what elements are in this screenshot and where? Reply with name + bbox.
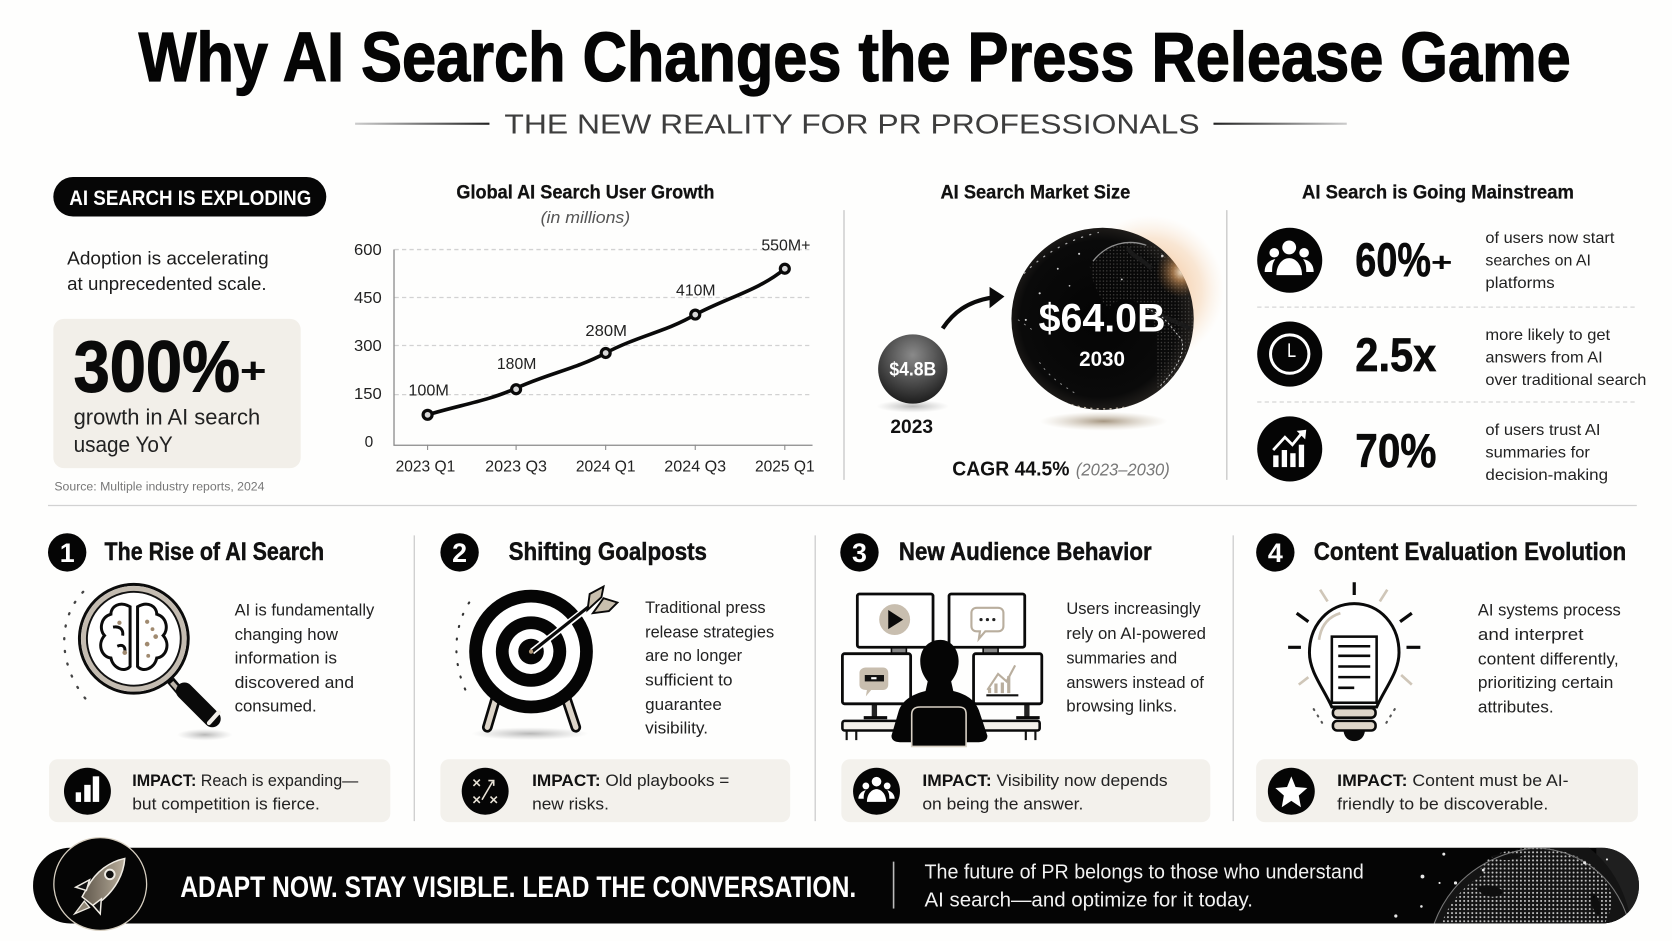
icon: person at monitors	[842, 594, 1042, 746]
impact card 4: IMPACT: Content must be AI-	[1337, 771, 1569, 790]
y axis labels	[354, 242, 382, 451]
data labels: 100M	[408, 383, 449, 400]
pill heading: AI SEARCH IS EXPLODING	[69, 186, 311, 210]
body text 2: release strategies	[645, 623, 774, 642]
CAGR label: (2023–2030)	[1076, 460, 1170, 480]
heading 4: Content Evaluation Evolution	[1314, 539, 1626, 566]
icon: light bulb with document	[1288, 582, 1420, 741]
heading 2: Shifting Goalposts	[509, 539, 707, 566]
number badge 4: 4	[1268, 538, 1283, 568]
body text 2: are no longer	[645, 646, 743, 665]
y axis labels: 300	[354, 338, 382, 355]
data labels: 180M	[497, 356, 536, 373]
body text 2: sufficient to	[645, 671, 733, 690]
stat card: 300%+: +	[240, 350, 267, 391]
impact card 1: IMPACT: Reach is expanding—	[132, 771, 359, 790]
banner tagline: AI search—and optimize for it today.	[925, 889, 1253, 911]
body text 1: information is	[235, 648, 337, 667]
body text 1	[235, 600, 375, 715]
big sphere 2030: 2030	[1079, 347, 1125, 371]
body text 4: and interpret	[1478, 625, 1584, 644]
source note: Source: Multiple industry reports, 2024	[54, 480, 265, 494]
stat card: 300%+	[53, 319, 301, 468]
number badge 2: 2	[452, 538, 467, 568]
number badge 1: 1	[60, 538, 75, 568]
number badge 4	[1256, 533, 1295, 572]
data labels: 550M+	[761, 238, 810, 255]
x axis labels: 2024 Q3	[664, 458, 726, 475]
data points	[423, 264, 789, 419]
CAGR label: CAGR 44.5%	[952, 459, 1070, 481]
stat: 60%+	[1257, 228, 1615, 293]
stat: 2.5x: more likely to get	[1485, 327, 1611, 344]
stat: 2.5x: over traditional search	[1485, 372, 1646, 389]
adoption text: Adoption is accelerating	[67, 247, 269, 268]
data labels: 410M	[676, 282, 716, 299]
body text 3: rely on AI-powered	[1066, 624, 1206, 643]
stat: 70%: decision-making	[1485, 467, 1608, 484]
panel 1: the rise of AI search	[48, 533, 390, 822]
body text 4: attributes.	[1478, 697, 1554, 716]
stat: 60%+: +	[1431, 249, 1452, 277]
body text 1: consumed.	[235, 696, 317, 715]
stat: 2.5x: 2.5x	[1355, 329, 1436, 381]
impact card 4	[1256, 759, 1638, 822]
number badge 1	[48, 533, 86, 572]
body text 2: guarantee	[645, 695, 722, 714]
x axis labels: 2023 Q3	[485, 458, 547, 475]
impact card 3: on being the answer.	[922, 794, 1083, 813]
body text 3	[1066, 599, 1206, 715]
impact card 2: IMPACT: Old playbooks =	[532, 771, 729, 790]
stat: 60%+: platforms	[1485, 275, 1555, 292]
rocket badge	[54, 838, 147, 930]
number badge 2	[440, 533, 479, 572]
subtitle with rules: THE NEW REALITY FOR PR PROFESSIONALS	[504, 108, 1200, 139]
panel: market size	[877, 182, 1224, 481]
panel 2: shifting goalposts	[440, 533, 790, 822]
x axis labels: 2025 Q1	[755, 458, 815, 475]
impact card 2	[440, 759, 790, 822]
small sphere 2023: $4.8B	[889, 359, 936, 380]
body text 2: visibility.	[645, 719, 708, 738]
globe texture	[1394, 848, 1639, 923]
call-to-action banner	[33, 838, 1639, 930]
line chart: user growth	[354, 182, 815, 475]
heading 1: The Rise of AI Search	[105, 539, 324, 566]
banner tagline	[925, 862, 1364, 911]
stat card: 300%+: usage YoY	[74, 432, 173, 457]
y axis labels: 450	[354, 290, 382, 307]
icon: magnifying glass with brain	[64, 584, 232, 741]
x axis labels	[396, 458, 815, 475]
stat: 60%+: 60%	[1355, 234, 1431, 286]
panel: going mainstream	[1257, 182, 1646, 484]
stat: 70%: of users trust AI	[1485, 422, 1601, 439]
panel 4: content evaluation evolution	[1256, 533, 1638, 822]
banner headline: ADAPT NOW. STAY VISIBLE. LEAD THE CONVERSATION.	[180, 871, 856, 904]
impact card 3: IMPACT: Visibility now depends	[922, 771, 1168, 790]
body text 3: browsing links.	[1066, 696, 1177, 715]
small sphere 2023	[877, 334, 949, 438]
impact card 2: new risks.	[532, 794, 609, 813]
data labels: 280M	[585, 323, 627, 340]
body text 4: prioritizing certain	[1478, 673, 1613, 692]
big sphere 2030	[1011, 215, 1224, 431]
body text 4	[1478, 600, 1621, 716]
stat card: 300%+: 300%	[74, 326, 240, 407]
impact card 1: but competition is fierce.	[132, 794, 320, 813]
body text 1: changing how	[235, 625, 338, 644]
body text 1: discovered and	[235, 673, 354, 692]
chart title: (in millions)	[541, 208, 630, 227]
impact card 4: friendly to be discoverable.	[1337, 794, 1548, 813]
body text 3: answers instead of	[1066, 673, 1204, 692]
panel: AI search is exploding	[53, 177, 326, 494]
growth line	[428, 269, 785, 415]
adoption text: at unprecedented scale.	[67, 273, 267, 294]
number badge 3: 3	[852, 538, 867, 568]
body text 2: Traditional press	[645, 598, 766, 617]
body text 1: AI is fundamentally	[235, 600, 375, 619]
stat: 70%: summaries for	[1485, 444, 1591, 461]
small sphere 2023: 2023	[890, 416, 933, 438]
x axis labels: 2024 Q1	[576, 458, 636, 475]
panel 3: new audience behavior	[840, 533, 1210, 822]
body text 4: content differently,	[1478, 649, 1619, 668]
body text 3: summaries and	[1066, 648, 1177, 667]
impact card 1	[49, 759, 390, 822]
body text 2	[645, 598, 774, 738]
chart title: Global AI Search User Growth	[456, 182, 714, 203]
number badge 3	[840, 533, 879, 572]
stat card: 300%+: growth in AI search	[74, 404, 260, 429]
x axis labels: 2023 Q1	[396, 458, 455, 475]
stat: 60%+: searches on AI	[1485, 253, 1591, 270]
body text 4: AI systems process	[1478, 600, 1621, 619]
y axis labels: 150	[354, 386, 382, 403]
mainstream heading: AI Search is Going Mainstream	[1302, 182, 1574, 203]
stat: 60%+: of users now start	[1485, 230, 1615, 247]
growth arrow	[943, 287, 1004, 328]
chart title	[456, 182, 714, 227]
data labels	[408, 238, 810, 400]
stat: 70%: 70%	[1355, 425, 1436, 477]
stat: 70%	[1257, 416, 1608, 484]
market heading: AI Search Market Size	[941, 182, 1131, 203]
icon: target with arrow	[456, 587, 617, 740]
big sphere 2030: $64.0B	[1039, 297, 1165, 341]
stat: 2.5x: answers from AI	[1485, 350, 1603, 367]
adoption text	[67, 247, 269, 294]
CAGR label	[952, 459, 1170, 481]
y axis labels: 600	[354, 242, 382, 259]
y axis labels: 0	[365, 434, 373, 451]
pill heading	[53, 177, 326, 217]
banner tagline: The future of PR belongs to those who understand	[925, 862, 1364, 884]
heading 3: New Audience Behavior	[899, 539, 1152, 566]
stat: 2.5x	[1257, 322, 1646, 389]
impact card 3	[841, 759, 1210, 822]
body text 3: Users increasingly	[1066, 599, 1201, 618]
